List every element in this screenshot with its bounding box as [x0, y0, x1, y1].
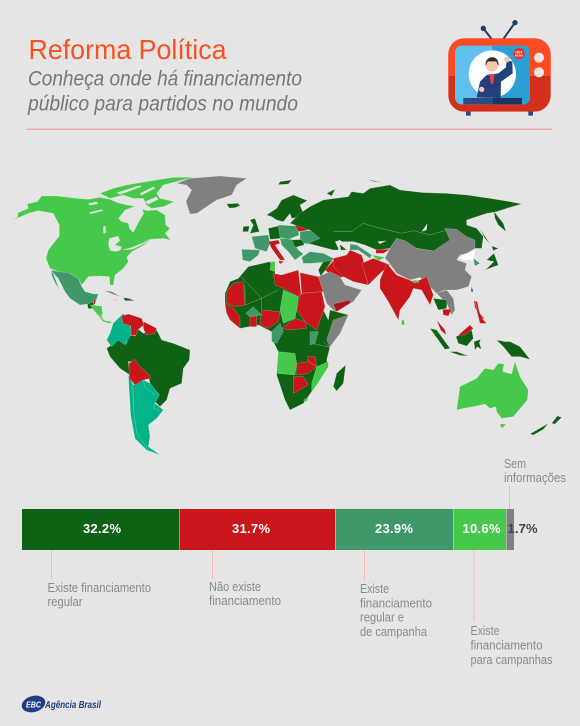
logo: EBC Agência Brasil: Agência Brasil — [44, 700, 101, 711]
label: sem informações: Sem — [504, 457, 526, 471]
label: não existe financiamento: Não existe — [209, 580, 261, 594]
label: existe financiamento regular e de campanha: financiamento — [360, 596, 432, 610]
label: existe financiamento para campanhas: financiamento — [470, 638, 543, 652]
label: existe financiamento regular e de campanha: de campanha — [360, 625, 427, 639]
label: não existe financiamento — [209, 580, 281, 608]
logo: EBC Agência Brasil — [20, 693, 101, 715]
icon: television with news anchor — [448, 20, 551, 116]
segment: para campanhas — [454, 509, 506, 550]
logo: EBC Agência Brasil: EBC — [26, 700, 42, 710]
label: existe financiamento regular e de campanha: Existe — [360, 582, 389, 596]
label: existe financiamento regular: regular — [48, 595, 82, 609]
label: não existe financiamento: financiamento — [209, 594, 281, 608]
value 32.2%: 32.2% — [83, 521, 121, 536]
label: sem informações: informações — [504, 471, 566, 485]
South America — [90, 305, 190, 455]
Oceania and Southeast Asia — [402, 300, 562, 435]
North America — [3, 176, 247, 319]
label: existe financiamento para campanhas — [470, 624, 552, 667]
segment: sem informações — [506, 509, 514, 550]
value 23.9%: 23.9% — [375, 521, 413, 536]
label: existe financiamento regular e de campanha: regular e — [360, 610, 404, 624]
value 10.6%: 10.6% — [462, 521, 501, 536]
stacked bar chart — [22, 509, 538, 550]
segment: existe financiamento regular — [22, 509, 180, 550]
value 1.7%: 1.7% — [508, 521, 538, 536]
Europe — [227, 180, 322, 273]
Asia — [290, 179, 522, 320]
title: Reforma Política — [28, 34, 227, 65]
label: existe financiamento regular: Existe financiamento — [48, 581, 151, 595]
icon: television with news anchor: HOT — [515, 50, 523, 54]
segment: não existe financiamento — [180, 509, 335, 550]
label: existe financiamento regular — [48, 581, 151, 609]
subtitle — [27, 68, 302, 116]
value 31.7%: 31.7% — [232, 521, 270, 536]
label: existe financiamento para campanhas: para campanhas — [470, 653, 552, 667]
subtitle: público para partidos no mundo — [27, 92, 298, 116]
label: sem informações — [504, 457, 566, 485]
Africa — [225, 262, 348, 410]
label: existe financiamento para campanhas: Existe — [470, 624, 500, 638]
world map — [3, 176, 562, 455]
subtitle: Conheça onde há financiamento — [28, 68, 302, 90]
segment: regular e de campanha — [336, 509, 453, 550]
label: existe financiamento regular e de campanha — [360, 582, 432, 639]
icon: television with news anchor: NEWS — [515, 54, 523, 58]
